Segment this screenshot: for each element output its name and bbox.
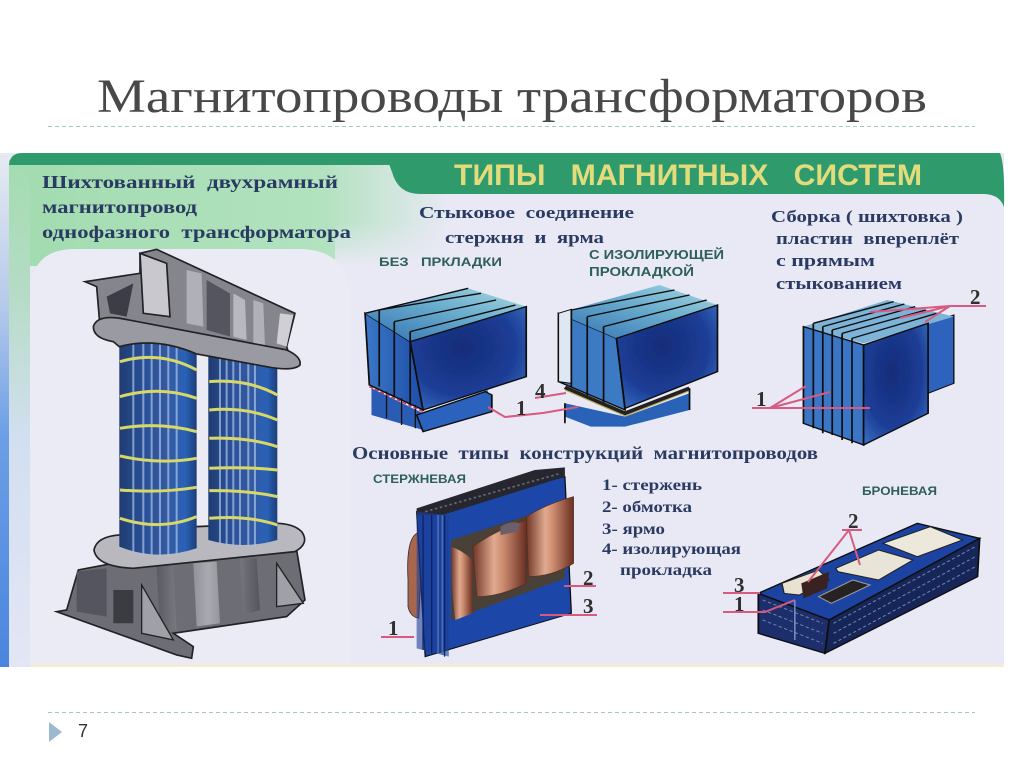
lower frame: [57, 523, 305, 658]
leader 2 core: [564, 566, 596, 590]
leader 3 shell: 3: [734, 573, 744, 597]
text block: laminated core caption: [42, 172, 351, 242]
callouts: numbered leader lines for joints: [488, 285, 986, 420]
text block: interleaved assembly caption: пластин впереплёт: [776, 229, 960, 248]
label: with insulating gasket: [589, 247, 724, 279]
diagram: core type transformer: [408, 467, 573, 657]
legend: numbered parts: 3- ярмо: [602, 521, 665, 538]
text block: interleaved assembly caption: стыкованием: [776, 274, 903, 293]
leader 1 shell: [723, 592, 795, 616]
right limb: [208, 353, 277, 547]
page number: 7: [78, 721, 88, 741]
icon: footer triangle: [49, 722, 62, 742]
diagram: butt joint without gasket: [365, 288, 526, 432]
leader 1 core: [381, 616, 414, 640]
heading: main core construction types: Основные типы конструкций магнитопроводов: [352, 443, 818, 463]
leader 3 core: 3: [583, 594, 594, 618]
callouts: numbered leader lines for core types: [381, 509, 862, 640]
legend: numbered parts: 2- обмотка: [602, 499, 692, 516]
label: shell type: БРОНЕВАЯ: [862, 486, 937, 498]
left limb: [119, 326, 197, 557]
diagram: butt joint with gasket: [558, 285, 717, 427]
text block: butt joint caption: [419, 203, 634, 247]
text block: butt joint caption: стержня и ярма: [445, 228, 604, 247]
leader 4: 4: [535, 379, 546, 403]
leader 1 shell: 1: [734, 592, 744, 616]
label: without gasket: БЕЗ ПРКЛАДКИ: [379, 257, 502, 269]
leader 3 core: [540, 594, 597, 618]
legend: numbered parts: [602, 477, 741, 579]
leader 1 right: 1: [756, 387, 766, 411]
illustration: two-frame laminated core: [57, 249, 305, 658]
text block: butt joint caption: Стыковое соединение: [419, 203, 634, 222]
label: with insulating gasket: С ИЗОЛИРУЮЩЕЙ: [589, 247, 724, 262]
leader 2: [870, 285, 986, 322]
panel: illustration background: [0, 153, 1004, 667]
heading: types of magnetic systems: ТИПЫ МАГНИТНЫХ СИСТЕМ: [454, 159, 922, 192]
legend: numbered parts: 4- изолирующая: [602, 541, 741, 558]
diagram: interleaved assembly: [803, 300, 954, 445]
leader 2 shell: 2: [848, 509, 858, 533]
leader 2 core: 2: [583, 566, 594, 590]
label: core type: СТЕРЖНЕВАЯ: [373, 474, 466, 486]
leader 3 shell: [723, 573, 760, 597]
leader 1 right: [752, 386, 870, 411]
text block: interleaved assembly caption: [771, 207, 963, 293]
leader 1 core: 1: [388, 616, 398, 640]
legend: numbered parts: прокладка: [620, 562, 712, 579]
label: with insulating gasket: ПРОКЛАДКОЙ: [589, 264, 694, 279]
text block: laminated core caption: Шихтованный двухрамный: [42, 172, 338, 192]
leader 1: 1: [516, 396, 526, 420]
text block: interleaved assembly caption: Сборка ( шихтовка ): [771, 207, 963, 226]
leader 2 shell: [808, 509, 862, 582]
title: Магнитопроводы трансформаторов: [97, 70, 927, 123]
text block: laminated core caption: однофазного трансформатора: [42, 222, 351, 242]
upper frame: [85, 249, 300, 369]
text block: laminated core caption: магнитопровод: [42, 197, 197, 217]
leader 1: [488, 396, 578, 420]
diagram: shell type transformer: [758, 523, 980, 653]
text block: interleaved assembly caption: с прямым: [776, 251, 876, 270]
leader 4: [535, 379, 566, 403]
leader 2: 2: [970, 285, 980, 309]
legend: numbered parts: 1- стержень: [602, 477, 702, 494]
